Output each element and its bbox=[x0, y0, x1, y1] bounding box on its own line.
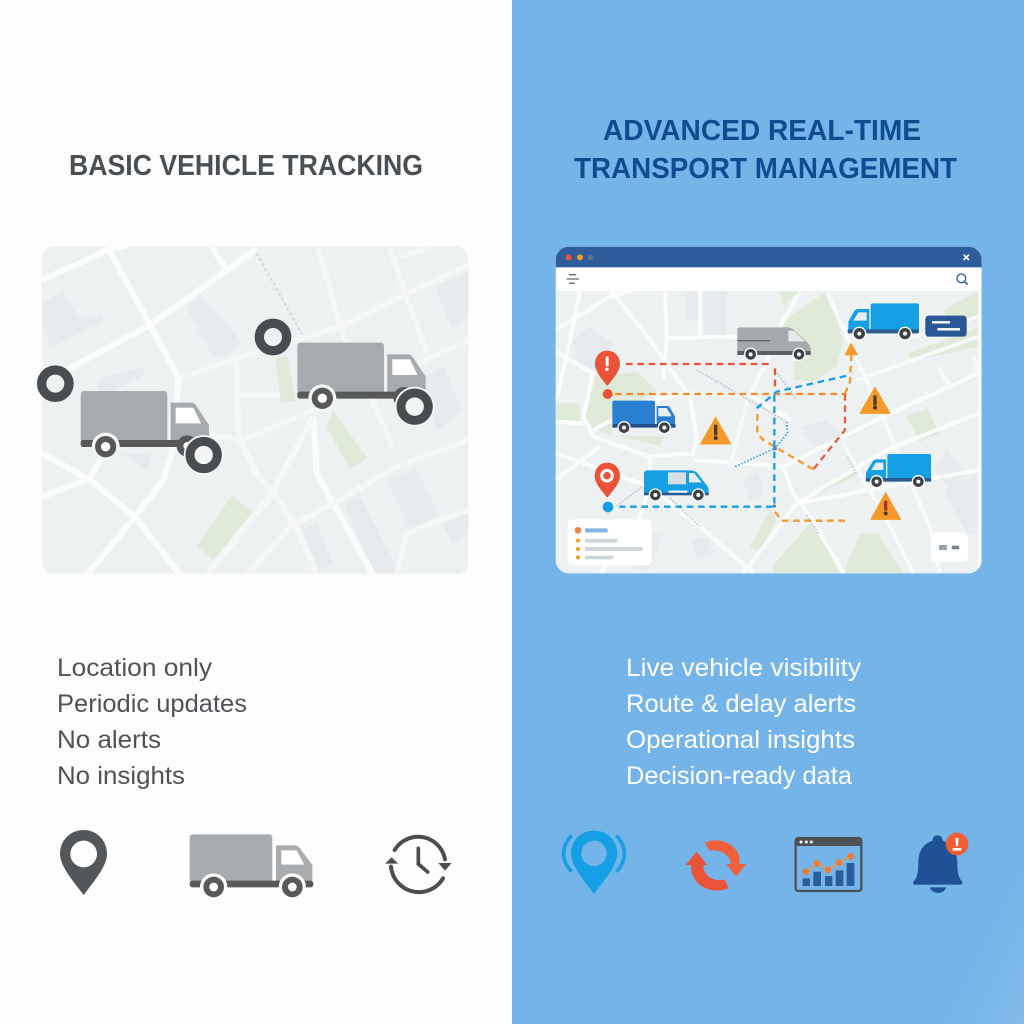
warning triangle small bbox=[845, 343, 858, 355]
blue van bbox=[644, 470, 709, 502]
map: basic tracking bbox=[42, 245, 468, 575]
icon: sync arrows bbox=[686, 840, 746, 891]
warning triangle 2 bbox=[860, 387, 890, 413]
icon row: advanced bbox=[564, 831, 968, 894]
feature list: basic: Location only bbox=[57, 654, 213, 682]
feature list: basic: Periodic updates bbox=[57, 690, 247, 718]
truck 2 bbox=[297, 343, 435, 427]
route: orange dashed lower bbox=[775, 512, 845, 521]
location ring: truck 2 bbox=[259, 323, 287, 351]
location ring: truck 1 bbox=[42, 370, 69, 397]
feature list: advanced: Decision-ready data bbox=[626, 762, 852, 790]
gray van bbox=[737, 327, 811, 361]
alert pin bbox=[595, 351, 620, 386]
heading: advanced bbox=[574, 115, 957, 185]
icon: location pin bbox=[60, 830, 107, 895]
status badge bbox=[925, 316, 967, 337]
warning triangle 1 bbox=[701, 417, 731, 444]
feature list: advanced: Live vehicle visibility bbox=[626, 654, 862, 682]
window title bar bbox=[556, 247, 982, 267]
feature list: advanced: Operational insights bbox=[626, 726, 855, 754]
feature list: advanced bbox=[626, 654, 862, 790]
target pin bbox=[595, 463, 620, 498]
icon: analytics dashboard bbox=[796, 838, 861, 891]
heading: advanced: TRANSPORT MANAGEMENT bbox=[574, 153, 957, 185]
dashboard window bbox=[556, 247, 982, 573]
route: red dashed bbox=[626, 364, 775, 388]
feature list: advanced: Route & delay alerts bbox=[626, 690, 856, 718]
feature list: basic bbox=[57, 654, 247, 790]
blue truck middle left bbox=[612, 401, 676, 434]
panel: basic vehicle tracking bbox=[42, 150, 468, 901]
feature list: basic: No insights bbox=[57, 762, 185, 790]
panel: advanced background bbox=[512, 0, 1024, 1024]
blue truck top right bbox=[848, 303, 919, 341]
dotted blue route bbox=[735, 422, 787, 467]
dotted connector lines bbox=[617, 370, 857, 533]
icon: live location pin bbox=[564, 831, 624, 894]
feature list: basic: No alerts bbox=[57, 726, 161, 754]
route nodes bbox=[603, 389, 777, 512]
panel: advanced real-time transport management bbox=[556, 115, 982, 894]
icon: clock with refresh arrows bbox=[385, 837, 452, 892]
heading: advanced: ADVANCED REAL-TIME bbox=[603, 115, 921, 147]
icon: truck bbox=[190, 834, 313, 901]
route: blue dashed bbox=[619, 375, 850, 507]
route: orange dashed bbox=[615, 392, 845, 396]
warning triangle 3 bbox=[871, 493, 901, 519]
zoom control card bbox=[931, 533, 968, 562]
icon: notification bell bbox=[913, 833, 968, 893]
live map bbox=[556, 291, 982, 573]
blue truck lower right bbox=[866, 454, 931, 488]
icon row: basic bbox=[60, 830, 452, 901]
truck 1 bbox=[81, 391, 224, 475]
toolbar bbox=[567, 274, 968, 285]
heading: basic: BASIC VEHICLE TRACKING bbox=[69, 150, 423, 182]
legend card bbox=[568, 519, 652, 565]
